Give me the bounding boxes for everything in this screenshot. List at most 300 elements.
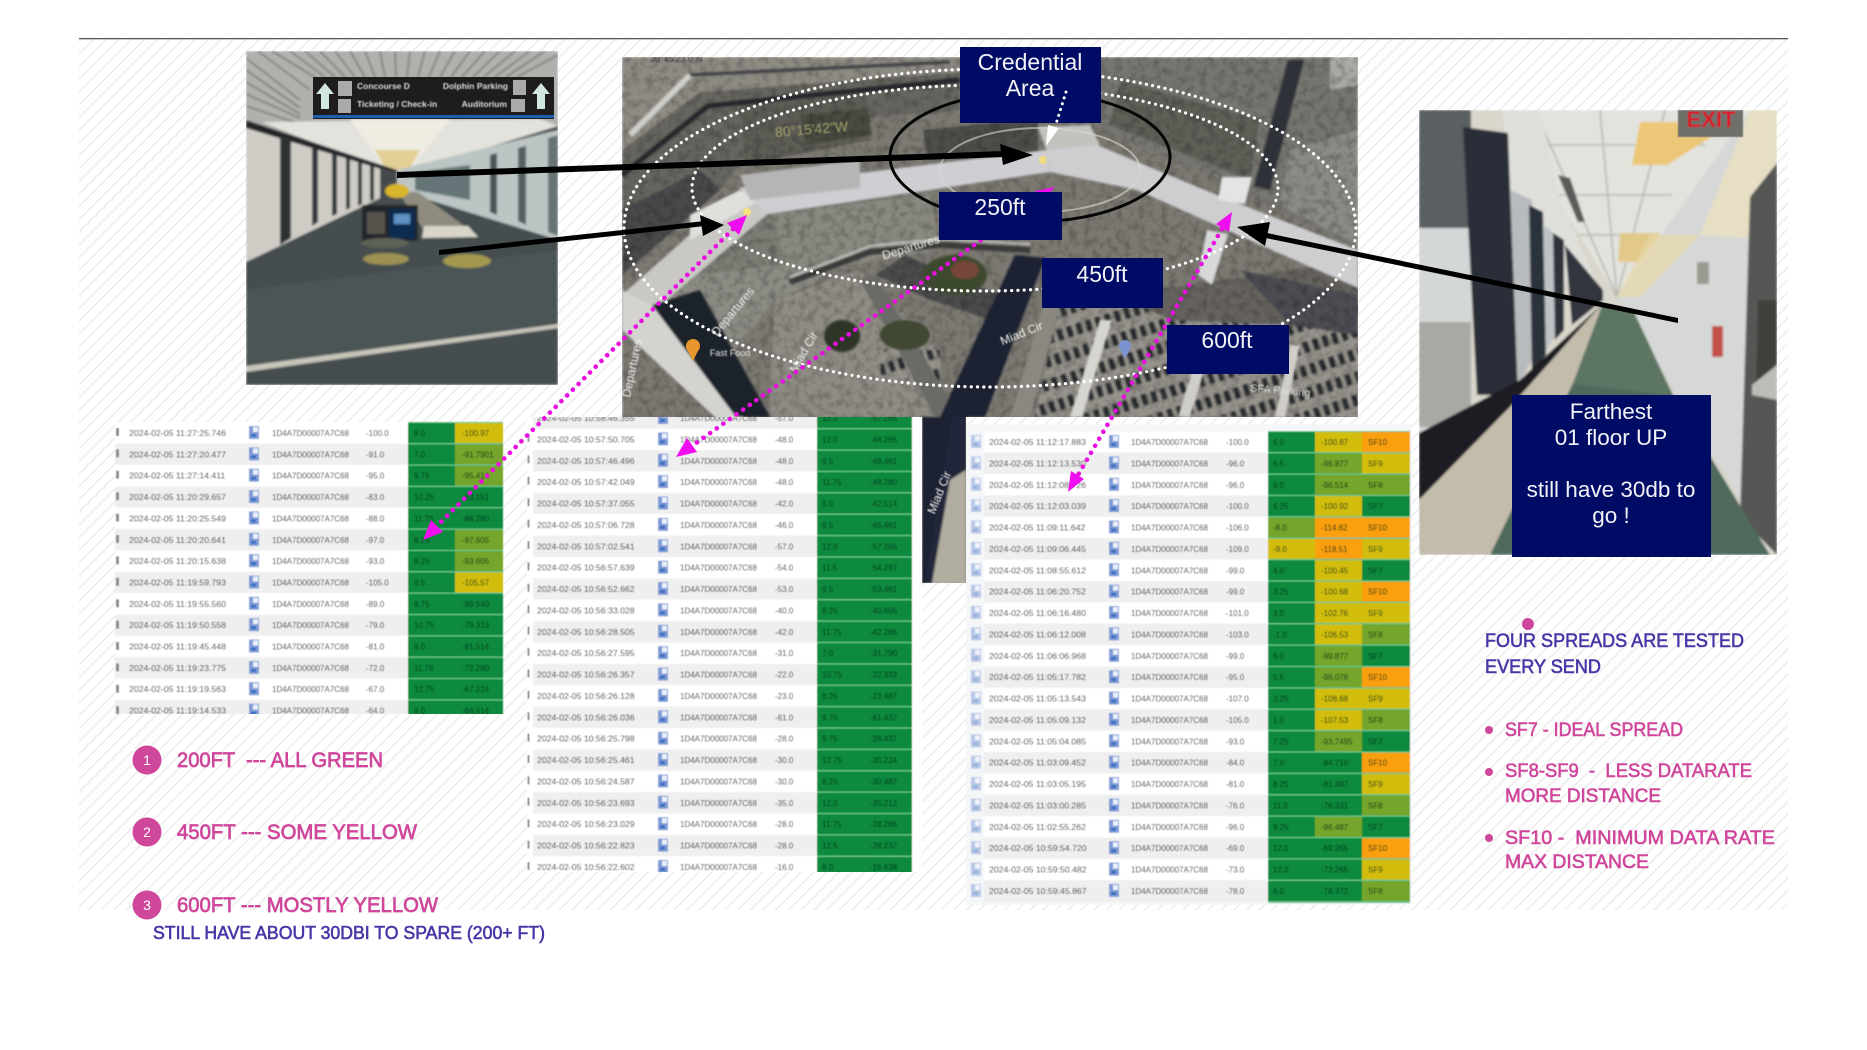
row [971,816,1410,838]
row: -79.0 [366,621,385,630]
row: -100.92 [1321,502,1349,511]
numbered item 1: 200ft: 1 [143,752,151,768]
row: 8.0 [414,429,426,438]
row: -40.0 [775,606,794,615]
row [533,536,912,557]
row: 2024-02-05 11:19:45.448 [129,642,226,652]
row: 9.75 [414,472,430,481]
row: SF9 [1368,866,1383,875]
row: 1D4A7D00007A7C68 [680,606,757,615]
row: -91.0 [366,450,385,459]
row: 1D4A7D00007A7C68 [272,472,349,481]
numbered item 3: 600ft [132,890,438,920]
label box: 450ft: 450ft [1076,261,1128,287]
row: 8.25 [414,557,430,566]
row: 2024-02-05 10:56:25.798 [537,734,635,744]
row: 1D4A7D00007A7C68 [680,500,757,508]
row: -69.265 [1321,844,1349,853]
row: SF8 [1368,887,1383,896]
photo: concourse corridor at ground level [246,51,558,385]
row: 1D4A7D00007A7C68 [680,842,757,851]
row: 7.0 [822,649,834,658]
row [533,856,912,878]
row: -76.0 [1226,802,1245,810]
row: -30.0 [775,778,794,786]
row: SF8 [1368,481,1383,490]
label box: farthest note: 01 floor UP [1555,425,1667,450]
row: -78.0 [1226,887,1245,896]
row: SF7 [1368,823,1383,832]
row: 3.25 [1273,695,1289,704]
label box: farthest note: Farthest [1570,399,1653,424]
row: 2024-02-05 10:56:33.028 [537,605,635,615]
label box: Credential Area: Area [1006,75,1054,101]
row: -83.151 [462,493,490,502]
row: 9.5 [822,457,834,466]
row: 1D4A7D00007A7C68 [680,756,757,765]
row: 6.5 [1273,459,1285,468]
row: 9.5 [822,585,834,594]
row: -61.0 [775,713,794,722]
row: 11.75 [414,664,434,673]
row: 1D4A7D00007A7C68 [680,585,757,594]
row: -99.0 [1226,588,1245,597]
map texture [622,57,1358,583]
map labels: Miad Cir [998,318,1045,348]
row: 4.0 [1273,566,1285,575]
row: -95.0 [366,472,385,481]
row [533,417,912,428]
row: SF8 [1368,802,1383,810]
row: 12.0 [822,435,838,444]
row: 2024-02-05 10:56:57.639 [537,563,635,573]
row [533,814,912,835]
row: SF9 [1368,780,1383,789]
label box: 450ft [1042,258,1163,308]
row: -100.0 [1226,502,1249,511]
row: -64.514 [462,707,490,716]
row [533,835,912,856]
row: -93.0 [366,557,385,566]
row: 12.0 [822,799,838,808]
row: -100.0 [1226,438,1249,447]
row: SF10 [1368,673,1388,682]
row [533,450,912,472]
row: 9.0 [414,642,426,652]
row: 3.25 [1273,588,1289,597]
note: margin to spare: STILL HAVE ABOUT 30DBI TO SPARE (200+ FT) [153,923,545,943]
row: -100.0 [366,429,389,438]
arrow: hallway photo to gateway [1237,222,1678,323]
row: -35.0 [775,799,794,808]
row: 2024-02-05 10:56:23.029 [537,819,635,829]
row: 1D4A7D00007A7C68 [272,707,349,716]
row: -57.265 [870,414,898,423]
row [971,453,1410,474]
row: 2024-02-05 10:59:50.482 [989,865,1087,875]
row: -48.280 [870,478,898,487]
row: 2024-02-05 11:20:25.549 [129,513,226,523]
background: hatched slide area [79,39,1788,910]
coverage ring: 600ft dotted [624,69,1356,387]
row: 12.75 [822,756,843,765]
row: SF7 [1368,737,1383,746]
row: 12.0 [822,414,838,423]
row: 2024-02-05 11:19:19.563 [129,684,226,694]
row: 1D4A7D00007A7C68 [680,435,757,444]
row: 2024-02-05 10:56:22.823 [537,841,635,851]
row: 8.0 [822,863,834,872]
row: 1D4A7D00007A7C68 [680,628,757,637]
row: 11.75 [822,478,842,487]
heading: four spreads [1485,630,1744,678]
row: 1D4A7D00007A7C68 [680,863,757,872]
row: 9.0 [822,500,834,508]
row: 1D4A7D00007A7C68 [272,514,349,523]
table: 450ft readings [527,407,922,878]
row: 6.0 [1273,652,1285,661]
row [533,792,912,814]
row: -100.68 [1321,588,1349,597]
row: 10.75 [822,671,843,680]
row: -96.514 [1321,481,1349,490]
row: -22.333 [870,671,898,680]
row: 1D4A7D00007A7C68 [1131,545,1208,554]
row: 1D4A7D00007A7C68 [1131,759,1208,768]
row: 1D4A7D00007A7C68 [1131,802,1208,810]
row: 1D4A7D00007A7C68 [680,478,757,487]
numbered item 3: 600ft: 3 [143,897,151,913]
row [533,642,912,664]
row: -91.7901 [462,450,494,459]
row: 1D4A7D00007A7C68 [1131,673,1208,682]
row: -83.0 [366,493,385,502]
green column backing [408,422,503,722]
row: 9.0 [1273,481,1285,490]
row: 11.5 [822,564,838,573]
row [971,495,1410,517]
row: -72.280 [462,664,490,673]
row: 1D4A7D00007A7C68 [680,735,757,744]
row: -28.0 [775,820,794,829]
row: 1D4A7D00007A7C68 [272,450,349,459]
row: 2024-02-05 11:12:03.039 [989,501,1086,511]
row: 2024-02-05 11:09:11.642 [989,522,1085,532]
row: -42.514 [870,500,898,508]
row [533,749,912,771]
map labels: Miad Cir [924,469,954,516]
row: -89.540 [462,600,490,609]
row [533,493,912,514]
row: -106.0 [1226,524,1249,532]
bullet: SF8-SF9 [1485,760,1752,807]
row [533,728,912,749]
numbered item 2: 450ft [132,818,417,846]
row: 1D4A7D00007A7C68 [680,820,757,829]
row: -64.0 [366,707,385,716]
credential area black ellipse [890,92,1170,222]
row: -107.53 [1321,716,1349,725]
green column backing [817,407,912,872]
row: 8.25 [1273,823,1289,832]
row: -78.372 [1321,887,1349,896]
row: 2024-02-05 10:57:46.496 [537,456,635,466]
row [971,581,1410,602]
row [533,707,912,728]
row: -100.87 [1321,438,1349,447]
row: -100.45 [1321,566,1349,575]
row: -96.487 [1321,823,1349,832]
row: -31.0 [775,649,794,658]
row [971,517,1410,538]
row: 2024-02-05 11:19:23.775 [129,663,226,673]
row: SF10 [1368,438,1388,447]
row: 2024-02-05 11:03:05.195 [989,779,1086,789]
row: 8.25 [1273,780,1289,789]
label box: 600ft [1167,325,1289,374]
row: 1D4A7D00007A7C68 [1131,630,1208,639]
row: 11.75 [414,514,434,523]
row [115,529,503,550]
row [971,431,1410,453]
row: SF10 [1368,524,1388,532]
table 2 panel [527,407,922,873]
row: 1D4A7D00007A7C68 [1131,823,1208,832]
row: -103.0 [1226,630,1249,639]
sign: overhead wayfinding: Auditorium [462,99,507,109]
row [971,538,1410,560]
row: 1D4A7D00007A7C68 [1131,695,1208,704]
row: -99.0 [1226,566,1245,575]
row: 2024-02-05 11:27:25.746 [129,428,226,438]
row: -73.0 [1226,866,1245,875]
label box: 250ft [939,192,1062,240]
row: -81.0 [366,642,385,652]
row: 1D4A7D00007A7C68 [272,536,349,545]
row: -53.0 [775,585,794,594]
row: 2024-02-05 10:56:28.505 [537,627,635,637]
row: SF9 [1368,609,1383,618]
row: 1D4A7D00007A7C68 [680,457,757,466]
row: 2024-02-05 10:56:26.357 [537,670,635,680]
row: -57.265 [870,542,898,551]
row: 2024-02-05 11:19:59.793 [129,578,226,588]
arrow: corridor floor to departures gateway [439,215,724,255]
row: 2024-02-05 11:27:20.477 [129,449,226,459]
row [971,560,1410,581]
row [115,422,503,444]
row: SF8 [1368,630,1383,639]
row: -67.224 [462,685,490,694]
row: 2024-02-05 10:57:50.705 [537,434,635,444]
row: 3.0 [1273,609,1285,618]
row: -46.0 [775,521,794,530]
row: 2024-02-05 10:59:54.720 [989,843,1087,853]
row: SF7 [1368,652,1383,661]
label box: 600ft: 600ft [1201,327,1253,353]
row: 11.0 [1273,802,1289,810]
row: -88.0 [366,514,385,523]
marker: gateway location credential area [1039,156,1047,164]
row [115,636,503,657]
row: -9.0 [1273,545,1287,554]
marker: gateway location departures [743,208,751,216]
row: 2024-02-05 10:57:37.055 [537,498,635,508]
photo: aerial satellite map [619,54,1360,583]
row: SF10 [1368,844,1388,853]
map structures: concourse and roads [622,60,1358,583]
row: 1D4A7D00007A7C68 [1131,609,1208,618]
row: 9.75 [414,600,430,609]
row: 1D4A7D00007A7C68 [272,621,349,630]
row [115,486,503,508]
row: -28.237 [870,842,898,851]
row: 1D4A7D00007A7C68 [1131,866,1208,875]
row: 2024-02-05 10:56:52.662 [537,584,635,594]
row: 1D4A7D00007A7C68 [680,713,757,722]
row: 1D4A7D00007A7C68 [272,557,349,566]
row: 6.25 [1273,502,1289,511]
row: -97.605 [462,536,490,545]
row: 2024-02-05 11:27:14.411 [129,471,225,481]
row: 6.0 [1273,887,1285,896]
row: 2024-02-05 11:03:09.452 [989,758,1086,768]
numbered item 3: 600ft: 600FT --- MOSTLY YELLOW [177,894,438,917]
row: -42.0 [775,628,794,637]
row [971,773,1410,795]
row: 1D4A7D00007A7C68 [680,414,757,423]
row [115,508,503,529]
row: 2024-02-05 10:57:06.728 [537,520,635,530]
row: -28.0 [775,735,794,744]
row: -96.877 [1321,459,1349,468]
row: -95.0 [1226,673,1245,682]
row: -89.0 [366,600,385,609]
row: 1D4A7D00007A7C68 [272,642,349,652]
row: 12.0 [822,542,838,551]
row: 1D4A7D00007A7C68 [272,429,349,438]
magenta arrow: 600ft table link [1068,212,1232,492]
row: -28.437 [870,735,898,744]
row: -30.487 [870,778,898,786]
row: 2024-02-05 11:19:50.558 [129,620,226,630]
bullet: SF8-SF9: MORE DISTANCE [1505,785,1661,807]
map labels: Departures [880,232,941,263]
row: 1D4A7D00007A7C68 [1131,502,1208,511]
numbered item 2: 450ft: 450FT --- SOME YELLOW [177,821,417,844]
row: -76.331 [1321,802,1349,810]
row: 2024-02-05 11:20:20.641 [129,535,226,545]
row: -93.0 [1226,737,1245,746]
row: 2024-02-05 10:57:42.049 [537,477,635,487]
label box: Credential Area: Credential [978,49,1082,75]
bullet: SF8-SF9: SF8-SF9 - LESS DATARATE [1505,760,1752,782]
heading: four spreads: FOUR SPREADS ARE TESTED [1485,630,1744,652]
map labels: Departures [708,284,757,339]
row: 11.75 [822,628,842,637]
row: 2024-02-05 11:09:06.445 [989,544,1086,554]
row: SF9 [1368,459,1383,468]
row [533,429,912,450]
row: -93.605 [462,557,490,566]
row: -81.487 [1321,780,1349,789]
row: -30.224 [870,756,898,765]
row: -48.265 [870,435,898,444]
row: -48.0 [775,435,794,444]
row: SF10 [1368,588,1388,597]
arrow: corridor photo to credential area [397,144,1033,178]
magenta arrow: 450ft table link [676,187,1055,457]
row: -57.0 [775,414,794,423]
row: 1D4A7D00007A7C68 [1131,844,1208,853]
row: 2024-02-05 11:08:55.612 [989,565,1086,575]
sign: exit: EXIT [1687,107,1736,132]
row: 7.25 [1273,737,1289,746]
row: 1D4A7D00007A7C68 [1131,887,1208,896]
icon: orange map pin [686,339,700,361]
row: -99.877 [1321,652,1349,661]
row: -114.62 [1321,524,1348,532]
coverage ring: 250ft faint [940,128,1140,212]
row: -72.0 [366,664,385,673]
top rule [79,38,1788,39]
label box: Credential Area [960,47,1101,123]
row: -16.638 [870,863,898,872]
row: 2024-02-05 11:03:00.285 [989,800,1086,810]
row: 2024-02-05 11:06:12.008 [989,629,1086,639]
row: -118.51 [1321,545,1348,554]
stray bullet dot [1522,618,1534,630]
green column backing [1268,431,1410,903]
row: 1D4A7D00007A7C68 [272,600,349,609]
row: 12.75 [414,685,435,694]
row: 2024-02-05 10:56:25.461 [537,755,635,765]
row [971,731,1410,752]
bullet: SF10: MAX DISTANCE [1505,851,1649,873]
row [971,752,1410,773]
row: -28.286 [870,820,898,829]
row: 2024-02-05 11:02:55.262 [989,822,1086,832]
row: -88.280 [462,514,490,523]
coverage ring: 450ft dotted [692,85,1278,291]
row: 11.75 [822,820,842,829]
row: 2024-02-05 10:56:27.595 [537,648,635,658]
row: 7.0 [414,450,426,459]
row [971,795,1410,816]
row: -23.487 [870,692,898,701]
pointer: credential area dotted white arrow [1046,92,1066,146]
photo: upstairs hallway [1419,107,1777,555]
row: 2024-02-05 11:12:17.883 [989,437,1086,447]
map labels: 80°15'42"W [774,118,849,140]
label box: farthest note: go ! [1592,503,1630,528]
row: -23.0 [775,692,794,701]
row: 8.25 [414,536,430,545]
row: 2024-02-05 10:59:45.867 [989,886,1087,896]
row [971,838,1410,859]
row: 2024-02-05 10:56:24.587 [537,776,635,786]
row: SF9 [1368,695,1383,704]
row: 1D4A7D00007A7C68 [1131,459,1208,468]
row: -99.0 [1226,652,1245,661]
row: -96.0 [1226,459,1245,468]
row: 1D4A7D00007A7C68 [1131,780,1208,789]
row: 5.5 [1273,673,1285,682]
row: 2024-02-05 11:06:16.480 [989,608,1086,618]
row markers column [528,434,530,872]
row: -69.0 [1226,844,1245,853]
row [115,550,503,572]
